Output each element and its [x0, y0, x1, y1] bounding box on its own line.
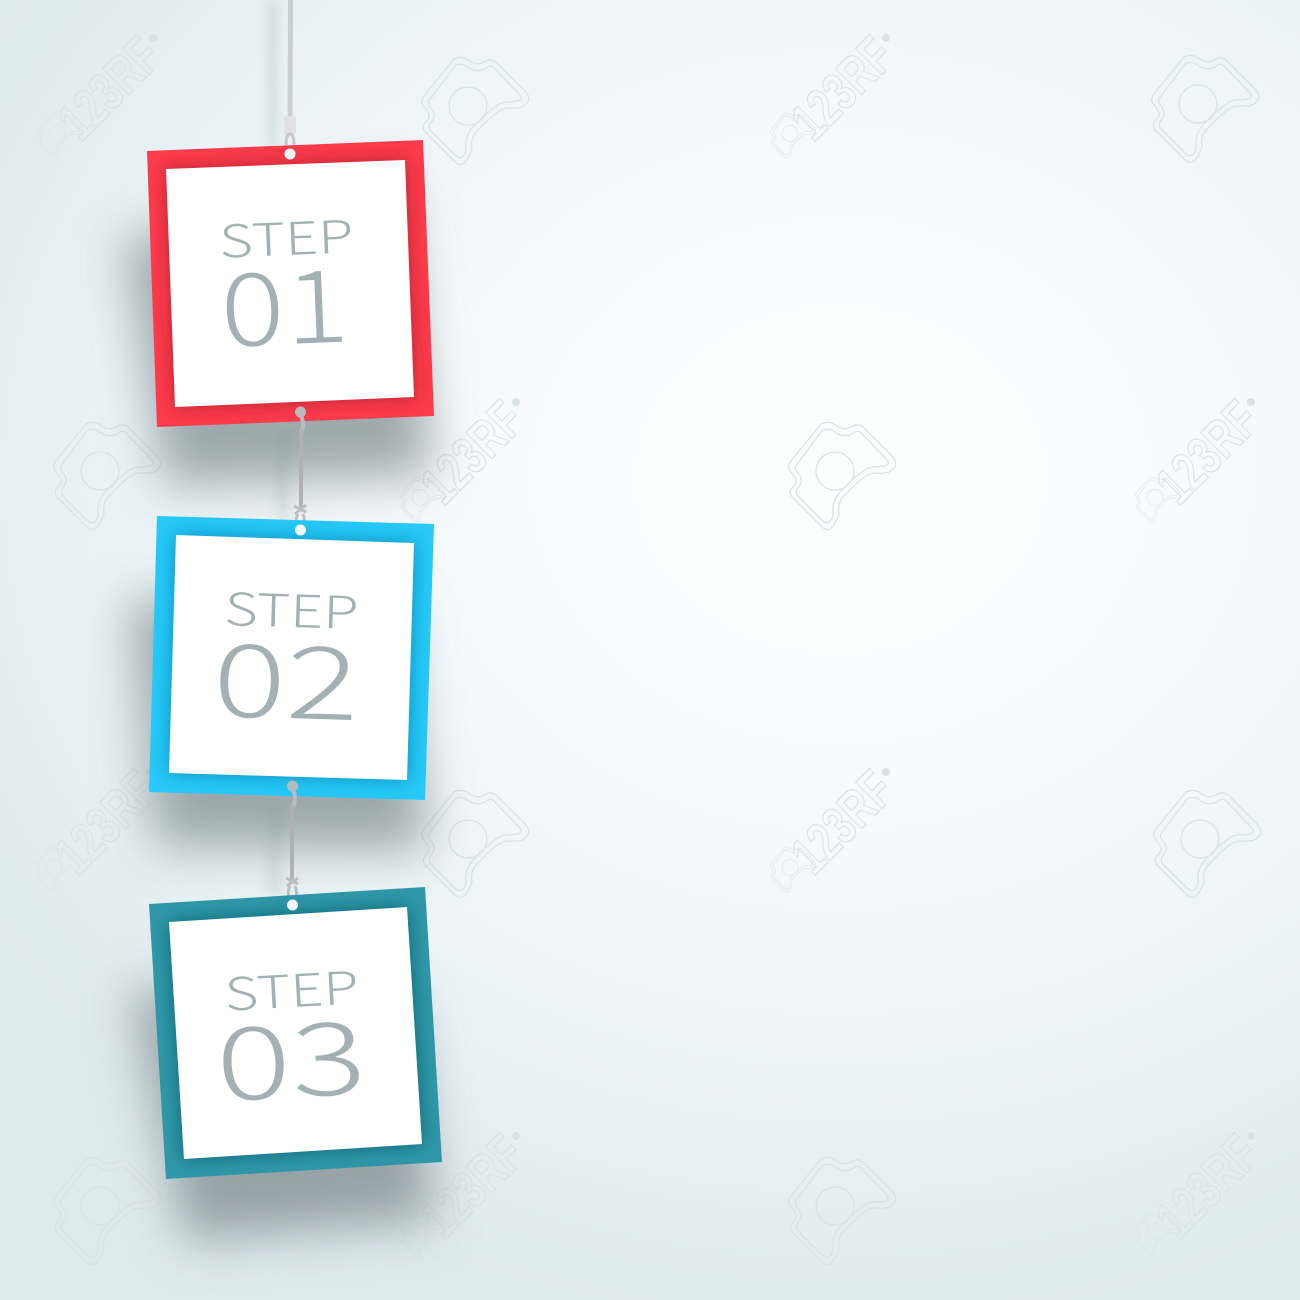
label step 03: STEP — [223, 951, 360, 1024]
string: 02 to 03 — [286, 790, 298, 902]
number 03: 03 — [212, 977, 370, 1131]
frame 01 inner shade — [166, 160, 414, 407]
number 02: 02 — [211, 600, 361, 750]
number 01: 01 — [217, 226, 351, 377]
string: top — [284, 0, 296, 152]
card 02 — [169, 535, 414, 780]
bottom hole 02 — [287, 780, 298, 792]
panel: step 01 — [147, 140, 434, 427]
panel: step 03 — [149, 887, 442, 1179]
label step 01: STEP — [218, 200, 354, 271]
string: 01 to 02 — [294, 416, 306, 528]
frame 03 — [149, 887, 442, 1179]
panel: step 02 — [149, 516, 434, 800]
frame 02 — [149, 516, 434, 800]
card 03 — [169, 907, 422, 1159]
bottom hole 01 — [295, 406, 306, 418]
frame 01 — [147, 140, 434, 427]
card 01 — [166, 160, 414, 407]
label step 02: STEP — [224, 573, 360, 642]
hole 03 — [287, 900, 298, 910]
string shadow — [268, 0, 287, 895]
hole 01 — [284, 148, 296, 160]
hole 02 — [295, 524, 306, 536]
panel shadows — [125, 180, 435, 1240]
frame 03 inner shade — [169, 907, 422, 1159]
frame 02 inner shade — [169, 535, 414, 780]
